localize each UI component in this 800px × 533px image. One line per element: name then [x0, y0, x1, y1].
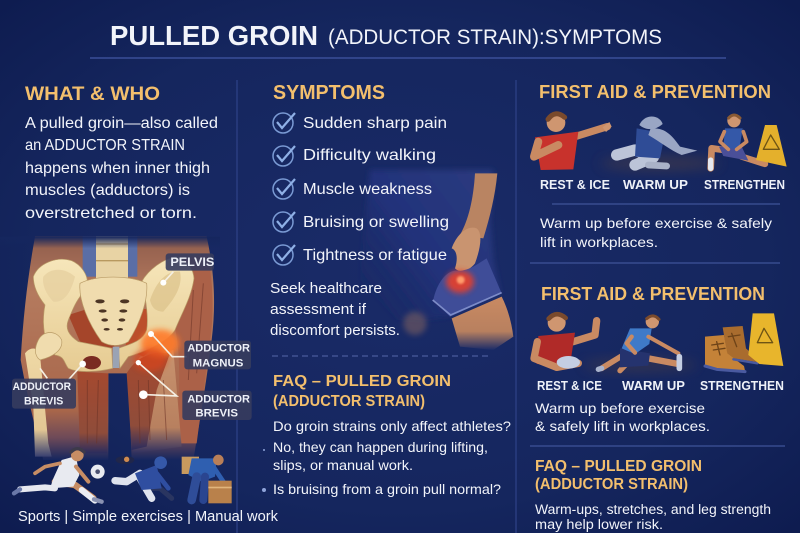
label: adductor brevis right: ADDUCTOR: [187, 393, 250, 405]
icons: rest, warm up, strengthen figures top: [534, 113, 787, 171]
illustration: thigh with painful groin: [360, 170, 513, 350]
text block: FAQ answers centre: No, they can happen during lifting,: [273, 439, 488, 455]
label: adductor magnus: [184, 341, 251, 370]
anatomy illustration: pelvis and adductors: [0, 237, 252, 460]
text block: warm up advice lower: & safely lift in workplaces.: [535, 418, 710, 434]
panel: symptoms: [262, 82, 513, 497]
text block: seek assessment: Seek healthcare: [270, 280, 382, 297]
heading: FAQ right: [535, 458, 702, 493]
item: bruising or swelling: [273, 212, 449, 232]
heading: FAQ right: FAQ – PULLED GROIN: [535, 458, 702, 475]
text block: warm up advice lower: [535, 400, 710, 434]
label: adductor magnus: MAGNUS: [193, 358, 244, 370]
figure: worker lifting box: [182, 455, 232, 503]
text block: FAQ answers centre: slips, or manual work.: [273, 457, 413, 473]
figure: seated man with ice: [534, 314, 597, 369]
item: muscle weakness: [273, 179, 432, 199]
panel: what and who: [0, 84, 279, 525]
text block: FAQ answer right: may help lower risk.: [535, 517, 663, 532]
item: tightness or fatigue: [273, 245, 447, 265]
labels: lower figures: WARM UP: [622, 379, 685, 393]
label: adductor brevis left: [12, 379, 76, 409]
title: PULLED GROIN: [110, 20, 318, 51]
text block: definition: happens when inner thigh: [25, 160, 210, 177]
text block: definition: [25, 115, 218, 222]
text block: seek assessment: discomfort persists.: [270, 322, 400, 339]
labels: lower figures: [537, 379, 784, 393]
heading: FAQ centre: (ADDUCTOR STRAIN): [273, 393, 425, 410]
labels: top figures: WARM UP: [623, 178, 688, 192]
heading: symptoms: SYMPTOMS: [273, 82, 385, 104]
figure: footballer: [14, 449, 105, 502]
text block: FAQ answers centre: Is bruising from a groin pull normal?: [273, 481, 501, 497]
item: tightness or fatigue: Tightness or fatigue: [303, 247, 447, 264]
labels: lower figures: STRENGTHEN: [700, 379, 784, 393]
item: bruising or swelling: Bruising or swelling: [303, 214, 449, 231]
item: muscle weakness: Muscle weakness: [303, 181, 432, 198]
item: sudden sharp pain: Sudden sharp pain: [303, 115, 447, 132]
title: [110, 20, 662, 51]
labels: top figures: STRENGTHEN: [704, 178, 785, 192]
heading: what and who: WHAT & WHO: [25, 84, 160, 105]
text block: FAQ answer right: Warm-ups, stretches, and leg strength: [535, 502, 771, 517]
text block: definition: A pulled groin—also called: [25, 115, 218, 132]
text block: seek assessment: assessment if: [270, 301, 367, 318]
text block: FAQ answer right: [535, 502, 771, 532]
heading: FAQ right: (ADDUCTOR STRAIN): [535, 476, 688, 493]
item: sudden sharp pain: [273, 113, 447, 133]
caption: causes: Sports | Simple exercises | Manual work: [18, 509, 279, 525]
label: adductor brevis right: BREVIS: [195, 408, 238, 420]
icon: wet floor sign: [756, 125, 787, 167]
text block: warm up advice top: [540, 215, 772, 250]
item: difficulty walking: Difficulty walking: [303, 147, 436, 164]
labels: top figures: [540, 178, 785, 192]
panel: first aid and prevention top: [534, 82, 787, 250]
text block: FAQ answers centre: Do groin strains only affect athletes?: [273, 418, 511, 434]
label: adductor brevis left: BREVIS: [24, 396, 64, 408]
text block: warm up advice top: Warm up before exercise & safely: [540, 215, 772, 231]
label: pelvis: PELVIS: [170, 255, 214, 269]
icon: work boots: [705, 326, 757, 372]
figure: man stretching: [598, 315, 679, 371]
item: difficulty walking: [273, 146, 436, 166]
figure: kneeling with towel: [617, 116, 697, 166]
label: pelvis: [166, 253, 214, 271]
text block: seek assessment: [270, 280, 400, 339]
text block: warm up advice lower: Warm up before exercise: [535, 400, 705, 416]
figure: athlete crouching: [115, 456, 172, 498]
heading: first aid lower: FIRST AID & PREVENTION: [541, 284, 765, 304]
figure: man gesturing stop: [534, 113, 612, 170]
heading: first aid top: FIRST AID & PREVENTION: [539, 82, 771, 102]
label: adductor brevis right: [182, 391, 252, 420]
label: adductor magnus: ADDUCTOR: [187, 343, 250, 355]
figure: lunging woman: [711, 114, 765, 168]
title: (ADDUCTOR STRAIN):SYMPTOMS: [328, 26, 662, 49]
panel: first aid and prevention lower: [534, 284, 784, 434]
text block: FAQ answers centre: [262, 418, 511, 497]
icons: rest, warm up, strengthen figures lower: [534, 313, 783, 372]
panel: FAQ right: [535, 458, 771, 532]
checklist: symptoms list: [273, 113, 449, 265]
icons: sports, exercise and manual work figures: [14, 449, 232, 503]
text block: definition: overstretched or torn.: [25, 205, 197, 222]
text block: definition: an ADDUCTOR STRAIN: [25, 137, 185, 154]
labels: lower figures: REST & ICE: [537, 379, 602, 393]
text block: definition: muscles (adductors) is: [25, 182, 190, 199]
heading: FAQ centre: FAQ – PULLED GROIN: [273, 373, 451, 390]
label: adductor brevis left: ADDUCTOR: [13, 381, 71, 393]
icon: caution sign lower: [748, 313, 783, 366]
heading: FAQ centre: [273, 373, 451, 410]
text block: warm up advice top: lift in workplaces.: [540, 234, 658, 250]
labels: top figures: REST & ICE: [540, 178, 610, 192]
